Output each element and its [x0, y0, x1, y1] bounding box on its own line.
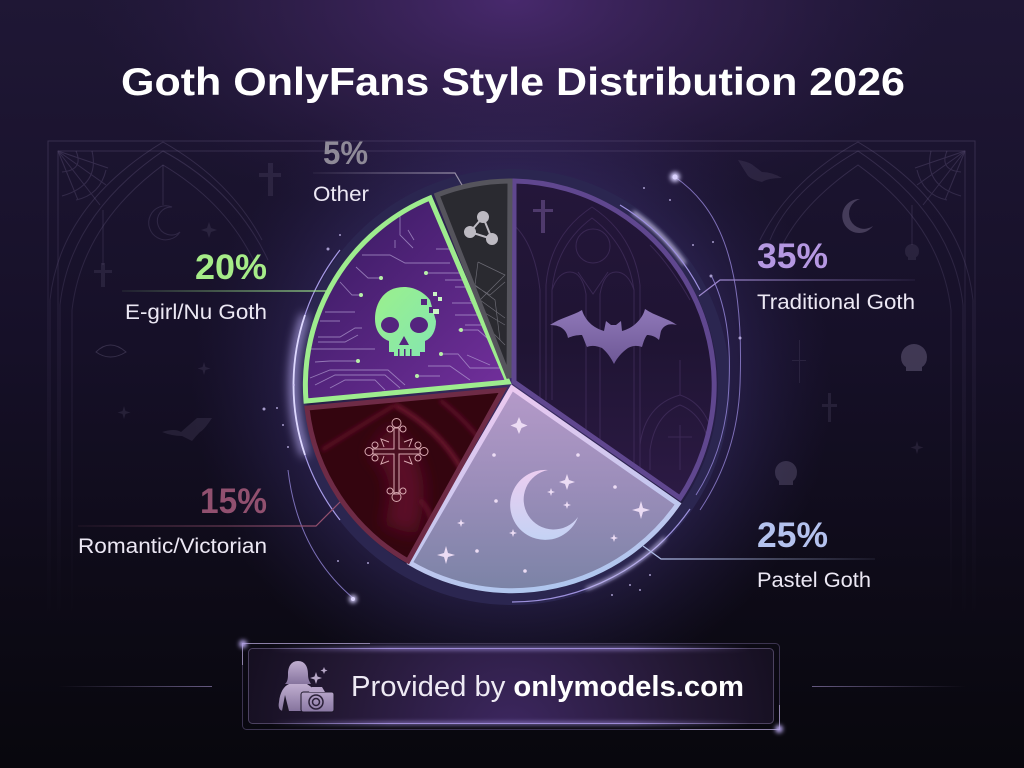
icon: left star: [201, 222, 217, 238]
icon: network: [464, 212, 498, 244]
icon: small star: [198, 362, 210, 375]
callout: Other: Other: [313, 183, 369, 206]
icon: right skull: [901, 344, 927, 371]
callout: Traditional Goth: [699, 237, 915, 314]
callout: E-girl/Nu Goth: [122, 248, 331, 324]
icon: right cross: [822, 393, 837, 422]
callout: Traditional Goth: Traditional Goth: [757, 291, 915, 314]
stars: [437, 417, 650, 573]
icon: right moon: [842, 199, 873, 233]
icon: hanging skull: [905, 244, 919, 260]
decorative gothic frame, left: [48, 141, 512, 620]
footer text: Provided by onlymodels.com: [351, 671, 744, 703]
callout: Pastel Goth: Pastel Goth: [757, 569, 871, 592]
segment: Romantic/Victorian 15%: [307, 390, 503, 561]
callout: Pastel Goth: [643, 516, 875, 592]
callout: Traditional Goth: 35%: [757, 237, 828, 276]
footer side lines: [58, 686, 966, 687]
icon: crescent moon: [510, 470, 578, 540]
particles: [262, 187, 742, 596]
decorative background icons: [94, 160, 927, 485]
callout: Romantic/Victorian: 15%: [200, 482, 267, 521]
icon: model with camera: [279, 661, 334, 712]
segment: Other 5%: [437, 181, 510, 378]
icon: thin sparkle: [792, 340, 806, 383]
callout: Romantic/Victorian: [78, 482, 340, 558]
icon: left web: [96, 345, 126, 357]
callout: Pastel Goth: 25%: [757, 516, 828, 555]
segment: Pastel Goth 25%: [410, 388, 678, 591]
footer badge: [239, 640, 783, 733]
icon: hanging cross: [94, 263, 112, 287]
icon: bat: [550, 309, 677, 364]
title: Goth OnlyFans Style Distribution 2026: [121, 61, 905, 104]
icon: glitch skull: [375, 287, 442, 356]
segment: E-girl/Nu Goth 20%: [305, 198, 508, 401]
callout: Romantic/Victorian: Romantic/Victorian: [78, 535, 267, 558]
segment: Traditional Goth 35%: [514, 181, 716, 498]
icon: left cross: [259, 163, 281, 196]
callout: Other: [313, 135, 462, 206]
decorative gothic frame, right: [512, 141, 975, 620]
icon: right star: [910, 441, 924, 454]
icon: left bat: [162, 418, 212, 441]
icon: ornate cross: [365, 418, 428, 502]
pie chart: [305, 181, 716, 591]
glow rings around pie: [288, 172, 741, 603]
icon: small star lower: [118, 406, 130, 419]
icon: window cross: [533, 200, 553, 233]
icon: lower skull: [775, 461, 797, 485]
icon: right bat: [738, 160, 782, 182]
callout: E-girl/Nu Goth: 20%: [195, 248, 267, 287]
callout: E-girl/Nu Goth: E-girl/Nu Goth: [125, 301, 267, 324]
callout: Other: 5%: [323, 135, 368, 171]
